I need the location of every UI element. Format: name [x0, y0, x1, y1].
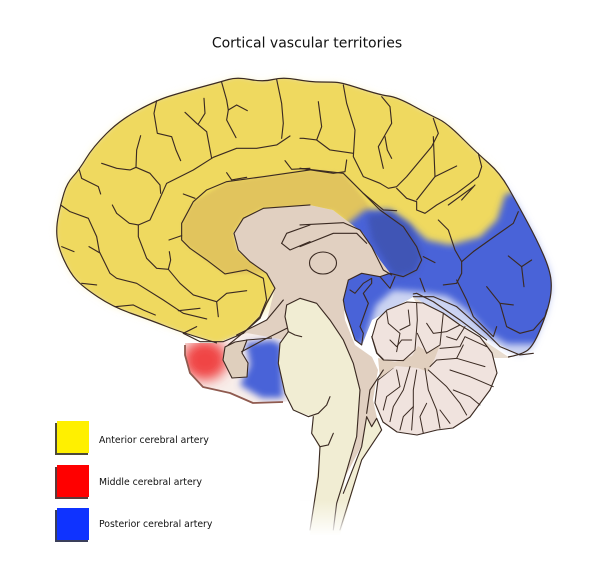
cortex outline [57, 78, 551, 357]
brainstem bottom fade [300, 500, 355, 536]
title: Cortical vascular territories [212, 36, 402, 52]
red territory [183, 340, 227, 380]
legend: posterior cerebral artery: Posterior cerebral artery [99, 519, 213, 530]
uncus hook [223, 340, 248, 378]
cerebellum [372, 302, 497, 435]
legend: middle cerebral artery [55, 465, 202, 499]
thalamus oval [310, 252, 336, 274]
legend: posterior cerebral artery [55, 508, 213, 542]
brain illustration [54, 74, 556, 530]
blue territory [240, 340, 283, 398]
brainstem [278, 298, 360, 535]
cerebellar folia [372, 303, 493, 433]
legend: middle cerebral artery: Middle cerebral artery [99, 477, 202, 488]
dark yellow cingulate band [182, 170, 375, 274]
brain tissue base [223, 205, 390, 477]
temporal lobe [183, 333, 295, 403]
legend: anterior cerebral artery [55, 421, 209, 455]
tentorium tail [413, 297, 510, 358]
medulla strip [334, 417, 382, 535]
outer glow [56, 77, 552, 355]
cerebellum hub [378, 345, 440, 378]
infographic [54, 36, 556, 542]
yellow territory [56, 77, 530, 343]
legend: anterior cerebral artery: Anterior cerebral artery [99, 435, 209, 446]
sulci frontal [61, 79, 310, 342]
temporal lower edge [185, 345, 283, 403]
blue territory [344, 188, 551, 349]
brainstem outlines [228, 298, 383, 530]
sulci parietal and occipital [300, 85, 547, 355]
legend [55, 421, 213, 542]
cortex [57, 78, 551, 354]
dark blue overlap [367, 212, 422, 277]
